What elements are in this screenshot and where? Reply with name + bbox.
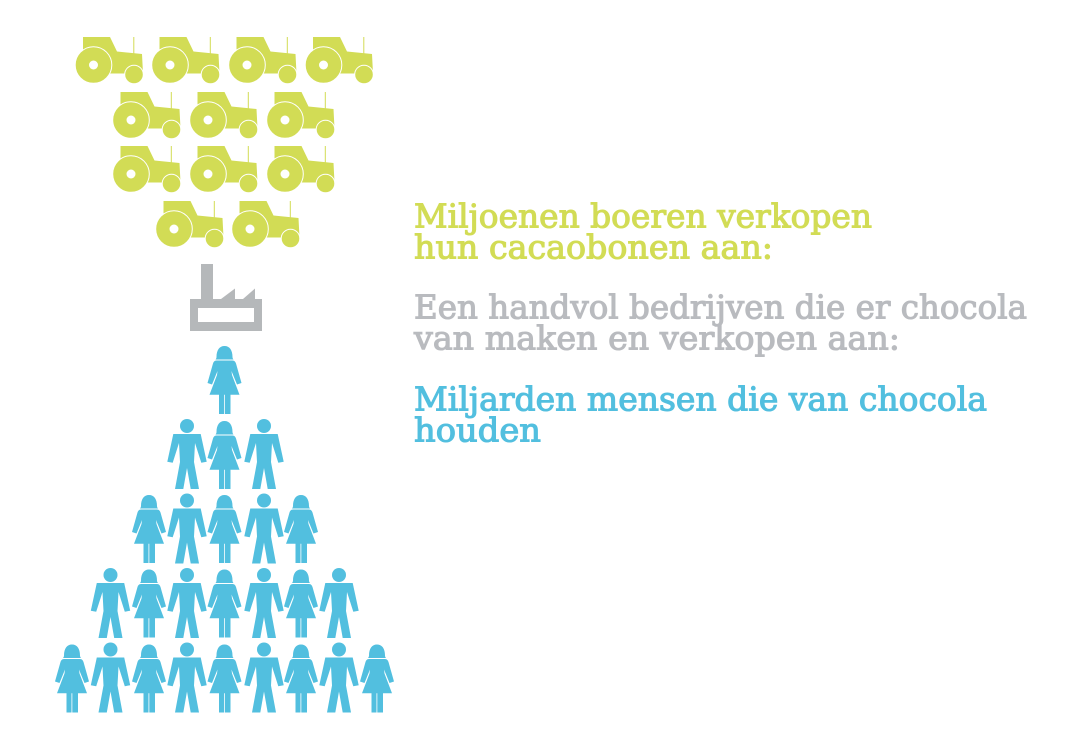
icon: tractor [113,92,181,139]
icon: woman [208,495,242,563]
icon: tractor [190,92,258,139]
icon: tractor [267,146,335,193]
icon: woman [208,570,242,638]
icon: man [244,568,284,638]
icon: man [244,419,284,489]
icon: woman [55,644,89,712]
icon: man [167,494,207,564]
text block: farmers [414,196,872,266]
icon: tractor [229,37,297,84]
icon: tractor [156,201,224,248]
icon: woman [284,644,318,712]
icon: tractor [267,92,335,139]
icon: man [244,494,284,564]
text block: farmers: hun cacaobonen aan: [414,228,773,266]
people row 1 [208,346,242,414]
tractor row 1 [75,37,373,84]
icon: woman [208,346,242,414]
text block: companies: Een handvol bedrijven die er chocola [414,288,1027,326]
icon: tractor [75,37,143,84]
text block: consumers [414,380,987,450]
icon: man [167,642,207,712]
text block: farmers: Miljoenen boeren verkopen [414,196,872,236]
people row 3 [132,494,318,564]
tractor row 4 [156,201,300,248]
icon: tractor [305,37,373,84]
icon: tractor [113,146,181,193]
text block: consumers: Miljarden mensen die van chocola [414,380,987,418]
text block: companies [413,288,1027,358]
text block: companies: van maken en verkopen aan: [413,318,900,358]
people row 2 [167,419,284,489]
icon: woman [132,644,166,712]
icon: woman [132,570,166,638]
people row 5 [55,642,394,712]
tractor row 3 [113,146,335,193]
icon: man [167,419,207,489]
icon: woman [208,644,242,712]
icon: woman [284,495,318,563]
icon: man [91,642,130,712]
icon: man [319,642,359,712]
people pyramid [55,346,394,712]
icon: woman [132,495,166,563]
icon: factory [190,264,262,331]
icon: tractor [152,37,220,84]
icon: tractor [190,146,258,193]
tractor row 2 [113,92,335,139]
icon: woman [360,644,394,712]
icon: woman [284,570,318,638]
icon: man [244,642,284,712]
icon: tractor [232,201,300,248]
icon: woman [208,421,242,489]
icon: man [91,568,130,638]
icon: man [319,568,359,638]
text block: consumers: houden [414,410,541,450]
icon: man [167,568,207,638]
tractors: farmers [75,37,373,248]
people row 4 [91,568,359,638]
